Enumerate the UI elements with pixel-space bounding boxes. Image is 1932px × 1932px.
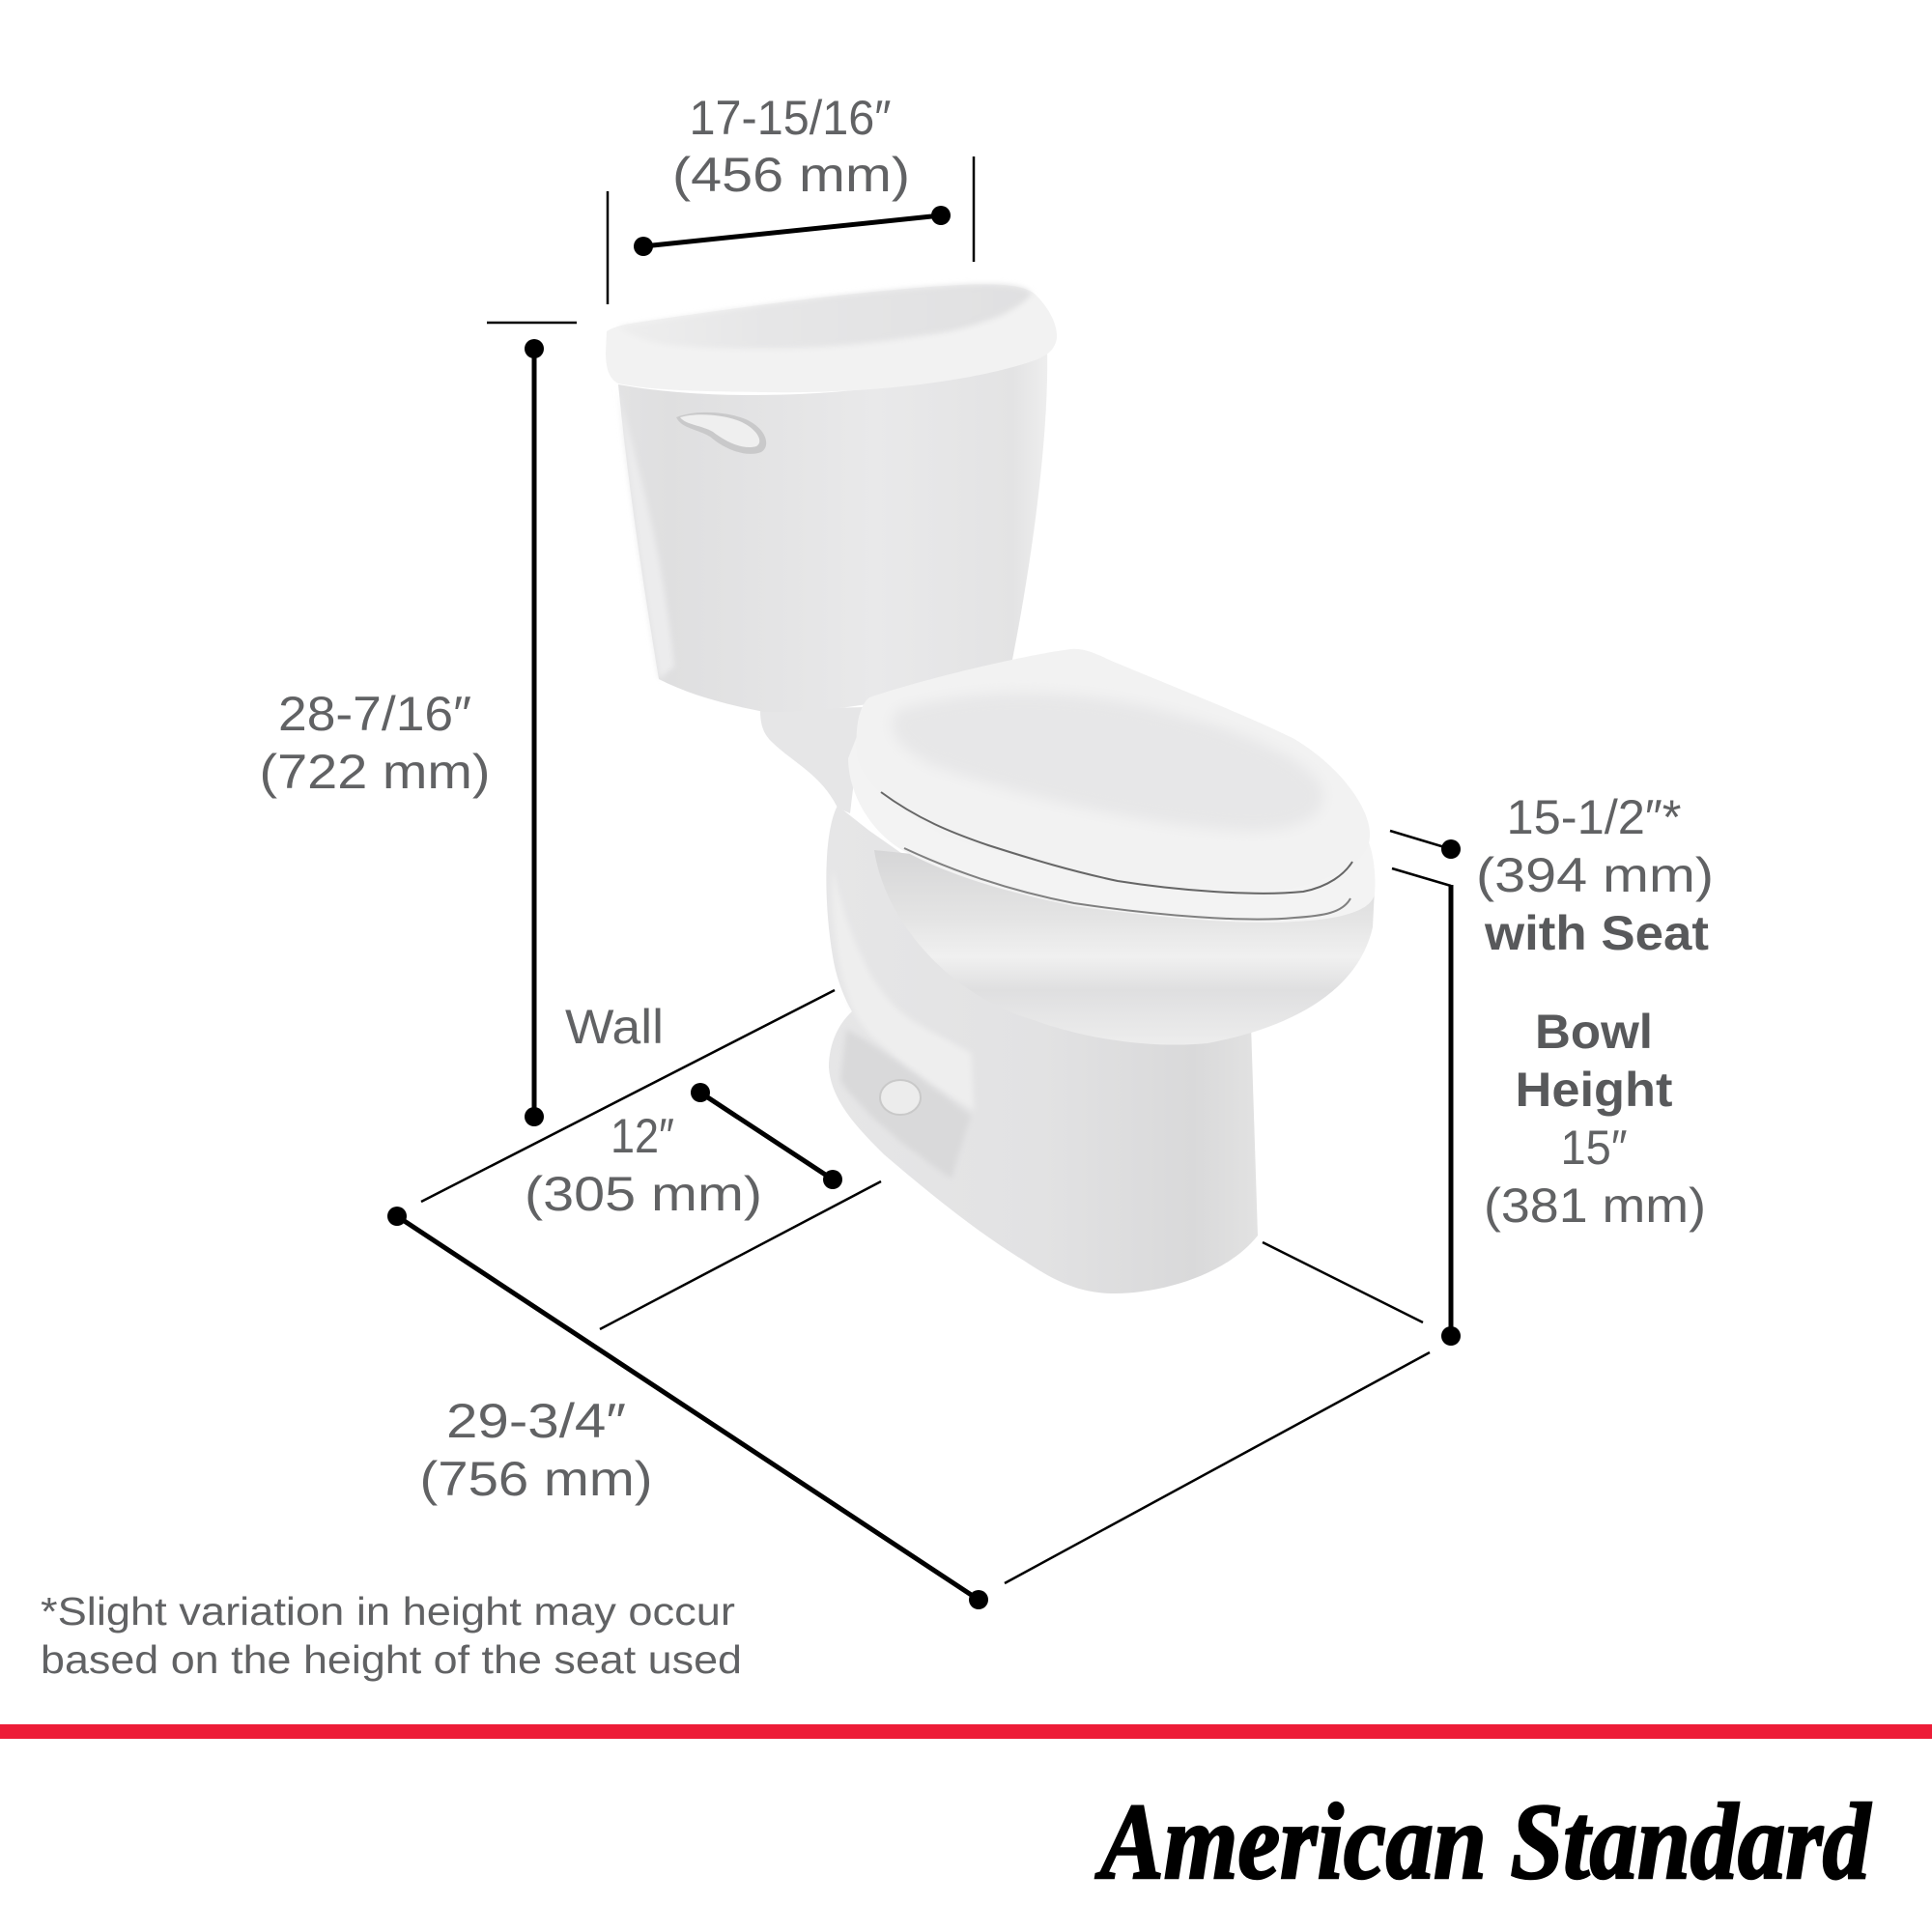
pedestal and base [826, 806, 1258, 1293]
height with seat label: with Seat [1484, 906, 1709, 960]
front guide lines [1005, 1242, 1430, 1583]
depth label: 29-3/4″ [446, 1394, 626, 1448]
tank lid [606, 284, 1057, 392]
rough-in label: 12″ [611, 1109, 674, 1163]
bolt cap [880, 1080, 921, 1115]
footnote [41, 1589, 742, 1682]
depth label [419, 1394, 653, 1506]
overall height label: 28-7/16″ [278, 687, 471, 741]
rough-in label [525, 1109, 762, 1221]
lid top surface [618, 284, 1032, 349]
toilet illustration [606, 284, 1375, 1293]
bowl height label [1484, 1005, 1706, 1233]
bowl height label: (381 mm) [1484, 1179, 1706, 1233]
rough-in label: (305 mm) [525, 1167, 762, 1221]
height with seat label: 15-1/2″* [1507, 790, 1681, 844]
base recess [840, 1029, 971, 1179]
wall guide lines [421, 990, 881, 1329]
toilet tank [618, 348, 1047, 712]
toilet neck [760, 707, 869, 813]
height with seat label: (394 mm) [1476, 848, 1714, 902]
overall height label: (722 mm) [259, 745, 491, 799]
bowl [874, 850, 1375, 1045]
red divider bar [0, 1724, 1932, 1739]
footnote: based on the height of the seat used [41, 1637, 742, 1682]
depth dimension [387, 1207, 988, 1609]
tank width label: 17-15/16″ [690, 91, 891, 145]
rough-in dimension [691, 1083, 842, 1189]
height with seat label [1476, 790, 1714, 960]
tank width label [672, 91, 910, 202]
seat lid recess [892, 693, 1323, 831]
depth label: (756 mm) [419, 1452, 653, 1506]
overall height label [259, 687, 491, 799]
wall label: Wall [565, 1000, 664, 1054]
bowl height label: 15″ [1561, 1121, 1627, 1175]
trapway highlight [832, 869, 974, 1111]
overall height dimension [487, 323, 577, 1126]
tank width dimension [608, 156, 974, 304]
seat shadow line [881, 792, 1352, 894]
bowl height dimension [1390, 831, 1461, 1346]
flush handle [676, 412, 766, 454]
tank width label: (456 mm) [672, 148, 910, 202]
bowl height label: Bowl [1535, 1005, 1653, 1059]
tank side shading [618, 386, 674, 679]
ring shadow line [904, 848, 1350, 920]
seat lid [857, 649, 1370, 891]
bowl height label: Height [1515, 1063, 1673, 1117]
seat ring [848, 705, 1375, 923]
footnote: *Slight variation in height may occur [41, 1589, 735, 1634]
